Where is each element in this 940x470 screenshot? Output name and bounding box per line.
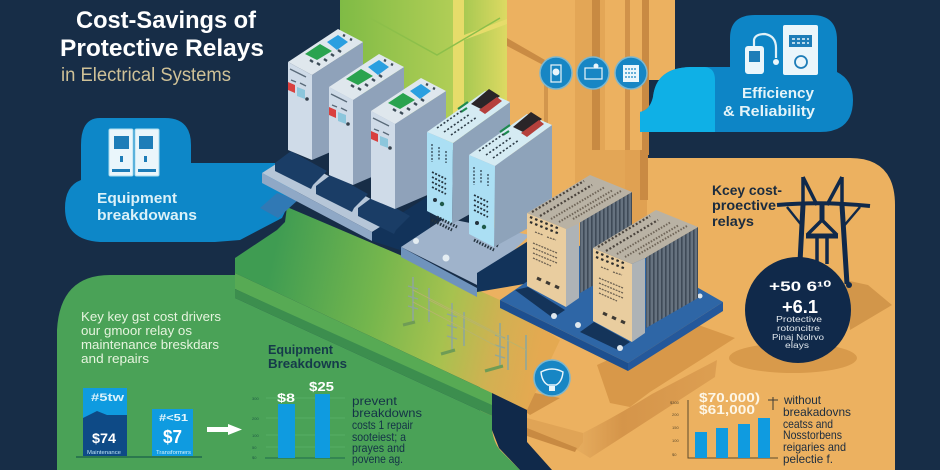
bar chart: cost without relays: $61,000 — [699, 402, 755, 417]
title — [60, 7, 264, 86]
heading: key cost protective relays: proective — [712, 197, 776, 213]
relay: light blue 1 — [427, 89, 510, 224]
orange backdrop panel — [480, 0, 895, 470]
efficiency and reliability label: & Reliability — [723, 103, 816, 120]
bar chart: breakdowns: 300 — [252, 396, 259, 401]
bar chart: breakdowns: 200 — [252, 416, 259, 421]
icon: monitoring device — [745, 25, 818, 75]
panel: efficiency and reliability callout — [640, 15, 853, 132]
base plate: blue — [500, 232, 723, 371]
heading: key cost protective relays: relays — [712, 213, 754, 229]
orange column stripes — [507, 0, 649, 250]
title: in Electrical Systems — [61, 65, 231, 86]
navy corner strip — [492, 393, 552, 470]
text block: without breakdowns: without — [783, 393, 822, 407]
bar chart: breakdowns: $25 — [309, 379, 334, 394]
title: Cost-Savings of — [76, 7, 257, 34]
text block: without breakdowns — [783, 393, 851, 466]
icon row: three blue badges — [540, 57, 647, 89]
text block: without breakdowns: breakadovns — [783, 405, 851, 419]
bar chart: cost without relays: 150 — [672, 425, 679, 430]
text block: prevent breakdowns: breakdowns — [352, 406, 422, 420]
bar chart: breakdowns: 100 — [252, 433, 259, 438]
icon: transmission tower and stat circle: +6.1 — [782, 297, 818, 317]
icon: transmission tower and stat circle: +50 6¹⁰ — [769, 278, 832, 294]
text block: without breakdowns: Nosstorbens — [783, 428, 842, 442]
bar chart: breakdowns — [252, 379, 345, 460]
panel: equipment breakdowns callout — [65, 118, 300, 242]
icon: transmission tower and stat circle — [729, 177, 892, 373]
badge 3 — [615, 57, 647, 89]
bar chart: breakdowns: 50 — [252, 445, 257, 450]
bar chart: cost without relays: $300 — [670, 400, 680, 405]
badge 1 — [540, 57, 572, 89]
icon: transmission tower and stat circle: Protective — [776, 315, 823, 324]
relay assembly — [262, 29, 723, 371]
icon: transmission tower and stat circle: Pinaj Nolrvo — [772, 333, 825, 342]
ground field — [235, 207, 560, 410]
cost card: maintenance: #5tw — [91, 392, 125, 404]
panel: cost drivers (green) — [57, 275, 552, 470]
equipment breakdowns label: Equipment — [97, 190, 177, 207]
relay: light blue 2 — [469, 112, 552, 247]
text block: prevent breakdowns: sooteiest; a — [352, 430, 406, 444]
cost card: maintenance: Maintenance — [87, 450, 121, 456]
bar chart: breakdowns: $8 — [277, 391, 295, 405]
cost card: repairs — [76, 409, 202, 457]
text block: prevent breakdowns: prayes and — [352, 441, 405, 455]
text block: without breakdowns: pelectie f. — [783, 452, 833, 466]
text block: key cost drivers: our gmoor relay os — [81, 323, 193, 338]
text block: prevent breakdowns: prevent — [352, 394, 398, 408]
badge 2 — [577, 57, 609, 89]
relay: tan 1 — [527, 175, 632, 307]
heading: equipment breakdowns: Equipment — [268, 342, 334, 357]
tower — [777, 177, 870, 288]
text block: prevent breakdowns: costs 1 repair — [352, 418, 413, 432]
base plate: grey — [262, 151, 430, 250]
cost card: maintenance — [83, 388, 127, 456]
bar chart: cost without relays: $70.000) — [699, 390, 760, 405]
stat circle — [745, 257, 851, 363]
bar chart: cost without relays — [670, 390, 778, 458]
bar chart: cost without relays: 100 — [672, 438, 679, 443]
text block: key cost drivers: Key key gst cost drivers — [81, 309, 221, 324]
base plate: blue-grey — [401, 218, 530, 297]
heading: key cost protective relays — [712, 182, 782, 229]
relay: tan 2 — [593, 210, 698, 342]
text block: key cost drivers: maintenance breskdars — [81, 337, 219, 352]
relay: grey 3 — [371, 78, 446, 209]
heading: equipment breakdowns: Breakdowns — [268, 356, 347, 371]
cost card: repairs: #<51 — [159, 413, 189, 424]
cost card: repairs: $7 — [163, 427, 182, 447]
text block: key cost drivers — [81, 309, 221, 366]
relay: grey 1 — [288, 29, 363, 160]
efficiency and reliability label — [723, 85, 816, 120]
text block: prevent breakdowns — [352, 394, 422, 466]
icon: lamp badge — [534, 360, 570, 396]
relay terminals — [432, 217, 498, 250]
text block: key cost drivers: and repairs — [81, 351, 150, 366]
bar chart: cost without relays: $0 — [672, 452, 677, 457]
equipment breakdowns label — [97, 190, 197, 224]
bar chart: cost without relays: 200 — [672, 412, 679, 417]
title: Protective Relays — [60, 35, 264, 62]
equipment breakdowns label: breakdowans — [97, 207, 197, 224]
icon: relay cabinets — [109, 129, 159, 176]
utility poles on field — [403, 277, 526, 371]
icon: transmission tower and stat circle: rotoncitre — [777, 324, 821, 333]
green stripes — [235, 273, 492, 416]
text block: prevent breakdowns: povene ag. — [352, 452, 403, 466]
text block: without breakdowns: reigaries and — [783, 440, 846, 454]
bar chart: breakdowns: $0 — [252, 455, 257, 460]
efficiency and reliability label: Efficiency — [742, 85, 815, 102]
shaded floor platform — [513, 322, 735, 458]
heading: equipment breakdowns — [268, 342, 347, 371]
heading: key cost protective relays: Kcey cost- — [712, 182, 782, 198]
cost card: maintenance: $74 — [92, 430, 116, 446]
cost card: repairs: Transformers — [156, 450, 192, 456]
text block: without breakdowns: ceatss and — [783, 417, 833, 431]
arrow — [207, 424, 242, 435]
icon: transmission tower and stat circle: elays — [785, 341, 809, 350]
lime upper column — [340, 0, 510, 150]
relay: grey 2 — [329, 54, 404, 185]
